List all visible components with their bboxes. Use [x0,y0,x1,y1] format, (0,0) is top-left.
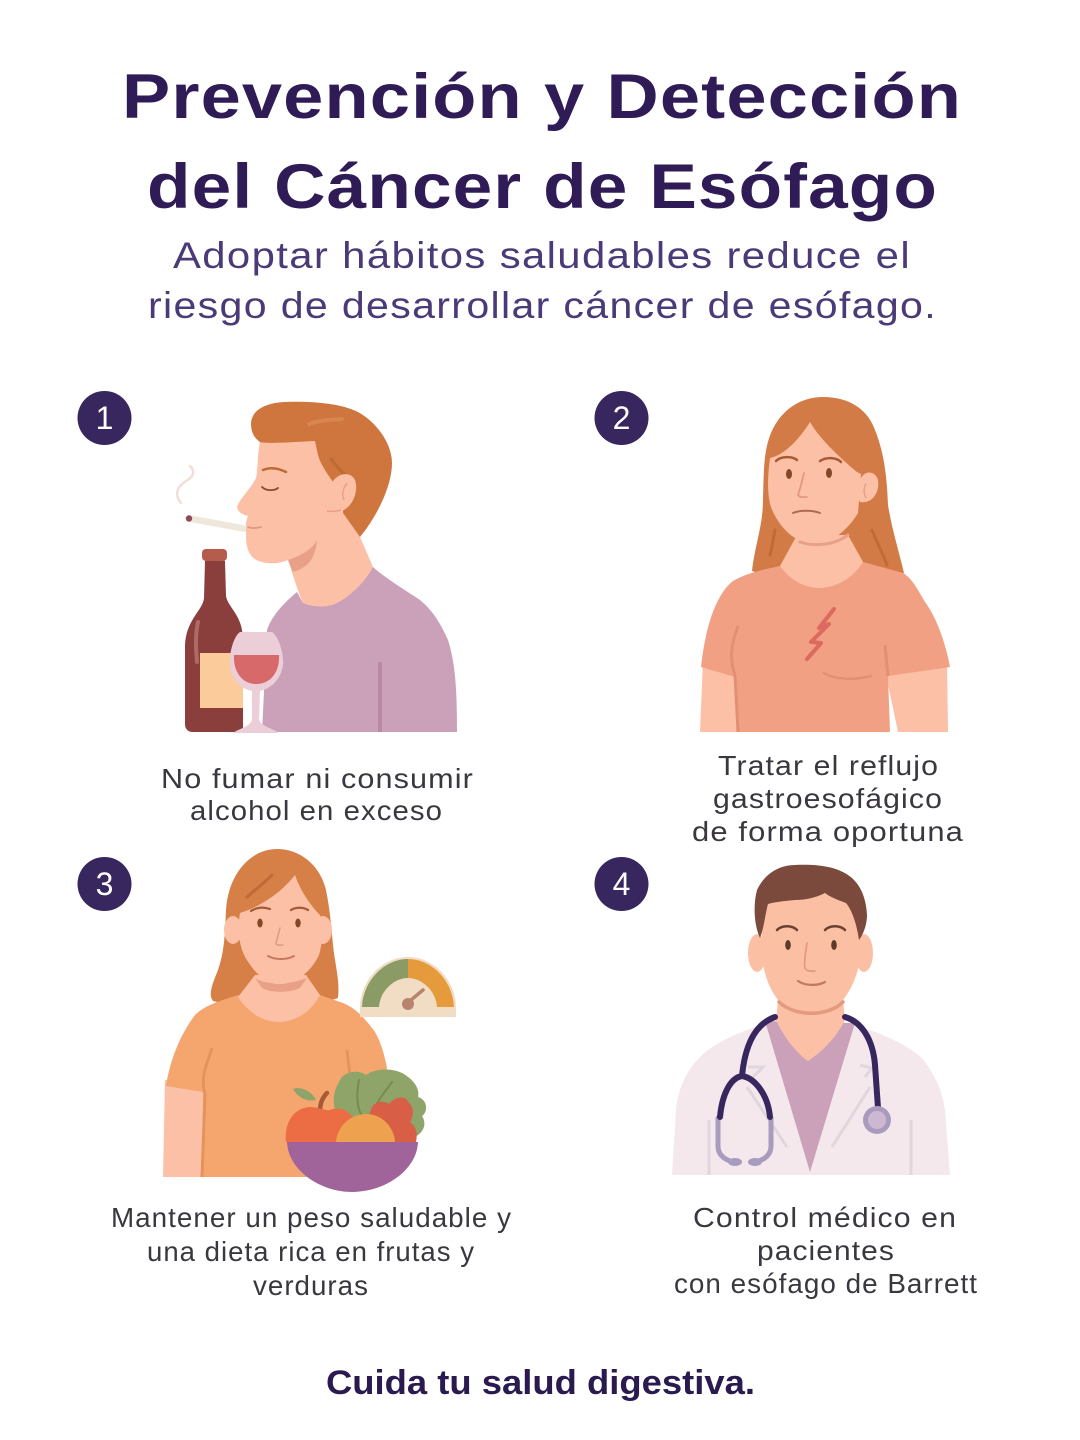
caption 3: verduras [253,1270,369,1301]
caption 2: gastroesofágico [713,783,943,814]
caption 4: Control médico en [693,1202,957,1233]
subtitle [148,235,937,326]
title: del Cáncer de Esófago [147,152,938,222]
caption 2 [692,750,964,847]
icon: fruit and salad bowl [286,1069,426,1192]
icon: doctor with stethoscope [672,865,950,1175]
badge: number 4: 4 [613,866,630,902]
caption 3 [111,1202,512,1301]
panel: tratar el reflujo [594,391,964,847]
caption 4: con esófago de Barrett [674,1268,978,1299]
caption 3: una dieta rica en frutas y [147,1236,475,1267]
subtitle: Adoptar hábitos saludables reduce el [173,235,911,276]
icon: woman with heartburn [700,397,950,732]
panel: no fumar ni alcohol [78,391,474,826]
caption 4: pacientes [757,1235,895,1266]
caption 2: de forma oportuna [692,816,964,847]
caption 1: No fumar ni consumir [161,763,474,794]
icon: stethoscope [718,1017,891,1166]
icon: man smoking with wine bottle and glass [177,402,457,733]
icon: cigarette and smoke [177,466,246,529]
subtitle: riesgo de desarrollar cáncer de esófago. [148,285,937,326]
icon: woman with healthy food [163,849,456,1192]
icon: heartburn lightning mark [807,609,834,659]
panel: control médico [594,857,978,1299]
title: Prevención y Detección [122,62,962,132]
caption 3: Mantener un peso saludable y [111,1202,512,1233]
icon: weight gauge [360,957,456,1017]
icon: wine glass [230,632,283,733]
icon: wine bottle [185,549,243,732]
footer message: Cuida tu salud digestiva. [326,1364,755,1402]
caption 1: alcohol en exceso [190,795,443,826]
badge: number 2 [594,391,648,445]
badge: number 3: 3 [96,866,113,902]
caption 1 [161,763,474,826]
panel: peso saludable y dieta [78,849,512,1301]
badge: number 4 [594,857,648,911]
title [122,62,962,222]
badge: number 2: 2 [613,400,630,436]
caption 2: Tratar el reflujo [718,750,939,781]
badge: number 1: 1 [96,400,113,436]
badge: number 3 [78,857,132,911]
badge: number 1 [78,391,132,445]
caption 4 [674,1202,978,1299]
